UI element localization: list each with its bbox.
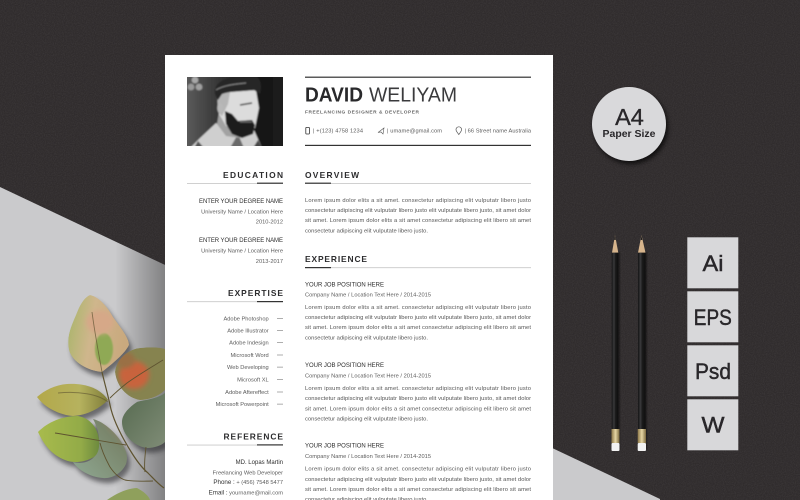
subtitle: FREELANCING DESIGNER & DEVELOPER xyxy=(305,110,420,116)
icon: phone xyxy=(306,127,309,134)
profile photo xyxy=(185,75,285,148)
reference contact: MD. Lopas Martin xyxy=(236,460,283,466)
format tile: W xyxy=(687,399,738,450)
job two: consectetur adipiscing elit vulputatr libero justo elit vulputate libero justo, sit amet dolor xyxy=(305,396,531,402)
pencil two xyxy=(638,235,647,451)
degree one xyxy=(199,199,283,226)
leaf: dark green right xyxy=(122,393,165,448)
reference contact: Freelancing Web Developer xyxy=(213,471,283,477)
badge: A4 paper size: Paper Size xyxy=(602,129,656,140)
degree two: University Name / Location Here xyxy=(201,248,283,254)
name: DAVID xyxy=(305,85,363,107)
hair xyxy=(215,77,261,100)
job three: Company Name / Location Text Here / 2014-2015 xyxy=(305,454,431,460)
format tile: Ai: Ai xyxy=(702,251,724,276)
leaf: top peach and green xyxy=(68,295,129,372)
header rule bottom xyxy=(305,145,531,146)
format tile: EPS: EPS xyxy=(694,305,732,330)
degree two xyxy=(199,238,283,265)
degree one: 2010-2012 xyxy=(256,220,283,226)
header rule top xyxy=(305,77,531,78)
job one: Company Name / Location Text Here / 2014-2015 xyxy=(305,293,431,299)
job three: YOUR JOB POSITION HERE xyxy=(305,444,384,450)
job three xyxy=(305,444,531,500)
heading rule xyxy=(187,183,283,184)
job two: Lorem ipsum dolor elits a sit amet. consectetur adipiscing elit vulputatr libero justo xyxy=(305,386,531,392)
right column: experience xyxy=(305,254,531,500)
left column: expertise xyxy=(187,288,283,408)
heading: EXPERTISE xyxy=(228,288,283,298)
job two: sit amet. Lorem ipsum dolor elits a sit amet consectetur adipiscing elit libero sit amet xyxy=(305,406,531,412)
paragraph: sit amet. Lorem ipsum dolor elits a sit amet consectetur adipiscing elit libero sit amet xyxy=(305,218,531,224)
icon: send xyxy=(378,128,384,134)
skills list: Microsoft Word xyxy=(231,353,269,359)
side fade xyxy=(217,92,230,116)
light grey diagonal background panel xyxy=(0,187,660,500)
skills list: Adobe Illustrator xyxy=(227,328,269,334)
job two: consectetur adipiscing elit vulputate libero justo. xyxy=(305,417,428,423)
paragraph: consectetur adipiscing elit vulputatr libero justo elit vulputate libero justo, sit amet dolor xyxy=(305,208,531,214)
branch stems and veins xyxy=(55,312,164,488)
neck xyxy=(216,113,240,138)
job two xyxy=(305,363,531,423)
surname: WELIYAM xyxy=(369,85,457,107)
shadow cast by the resume sheet xyxy=(115,241,165,500)
job one: sit amet. Lorem ipsum dolor elits a sit amet consectetur adipiscing elit libero sit amet xyxy=(305,325,531,331)
left column: education xyxy=(187,170,283,265)
leaf: dusky back leaf xyxy=(73,419,127,478)
contact row xyxy=(306,127,532,135)
heading: EDUCATION xyxy=(223,170,283,180)
reference contact: Email : yourname@mail.com xyxy=(209,489,283,496)
skills list xyxy=(216,316,283,408)
heading: REFERENCE xyxy=(224,431,283,441)
email: | umame@gmail.com xyxy=(387,128,442,134)
skills list: Adobe Aftereffect xyxy=(225,390,269,396)
job one: Lorem ipsum dolor elits a sit amet. consectetur adipiscing elit vulputatr libero justo xyxy=(305,305,531,311)
left column: reference xyxy=(187,431,283,496)
address: | 66 Street name Australia xyxy=(464,129,532,135)
job two: Company Name / Location Text Here / 2014-2015 xyxy=(305,373,431,379)
job one: YOUR JOB POSITION HERE xyxy=(305,282,384,288)
job three: consectetur adipiscing elit vulputatr libero justo elit vulputate libero justo, sit amet dolor xyxy=(305,477,531,483)
format tile: W: W xyxy=(702,413,725,438)
job one: consectetur adipiscing elit vulputatr libero justo elit vulputate libero justo, sit amet dolor xyxy=(305,315,531,321)
format tile: Ai xyxy=(687,237,738,288)
right column: overview xyxy=(305,170,531,235)
pencil one xyxy=(612,235,620,451)
job three: Lorem ipsum dolor elits a sit amet. consectetur adipiscing elit vulputatr libero justo xyxy=(305,467,531,473)
mouth and eye detail xyxy=(240,121,252,123)
heading rule xyxy=(305,267,531,268)
shirt xyxy=(190,123,262,148)
degree one: ENTER YOUR DEGREE NAME xyxy=(199,199,283,205)
heading rule xyxy=(187,444,283,446)
degree two: ENTER YOUR DEGREE NAME xyxy=(199,238,283,244)
job three: sit amet. Lorem ipsum dolor elits a sit amet consectetur adipiscing elit libero sit amet xyxy=(305,487,531,493)
illustration: leafy branch xyxy=(37,295,168,500)
paragraph: Lorem ipsum dolor elits a sit amet. consectetur adipiscing elit vulputatr libero justo xyxy=(305,198,531,204)
heading rule xyxy=(305,183,531,184)
reference contact xyxy=(209,460,283,496)
job two: YOUR JOB POSITION HERE xyxy=(305,363,384,369)
leaf: yellow olive xyxy=(37,384,108,416)
ear xyxy=(216,105,219,112)
reference contact: Phone : + (456) 7548 5477 xyxy=(213,479,283,486)
icon: map pin xyxy=(456,127,462,134)
skills list: Adobe Indesign xyxy=(229,341,269,347)
resume sheet xyxy=(165,55,553,500)
skills list: Microsoft Powerpoint xyxy=(216,402,269,408)
format tile: Psd xyxy=(687,345,738,396)
skills list: Adobe Photoshop xyxy=(223,316,269,322)
leaf: bright green xyxy=(38,416,99,462)
face xyxy=(218,90,259,132)
paragraph xyxy=(305,198,531,235)
leaf: orange xyxy=(115,347,165,400)
degree one: University Name / Location Here xyxy=(201,210,283,216)
heading: EXPERIENCE xyxy=(305,254,367,264)
skills list: Web Developing xyxy=(227,365,269,371)
badge: A4 paper size: A4 xyxy=(615,104,644,130)
leaf: bottom partial xyxy=(107,488,150,500)
skills list: Microsoft XL xyxy=(237,377,269,383)
paragraph: consectetur adipiscing elit vulputate libero justo. xyxy=(305,229,428,235)
format tile: Psd: Psd xyxy=(695,359,731,384)
degree two: 2013-2017 xyxy=(256,259,283,265)
job one: consectetur adipiscing elit vulputate libero justo. xyxy=(305,336,428,342)
phone number: | +(123) 4758 1234 xyxy=(313,129,363,135)
heading: OVERVIEW xyxy=(305,170,359,180)
heading rule xyxy=(187,301,283,302)
badge: A4 paper size xyxy=(592,87,668,164)
job one xyxy=(305,282,531,342)
format tile: EPS xyxy=(687,291,738,342)
beard xyxy=(225,111,255,138)
